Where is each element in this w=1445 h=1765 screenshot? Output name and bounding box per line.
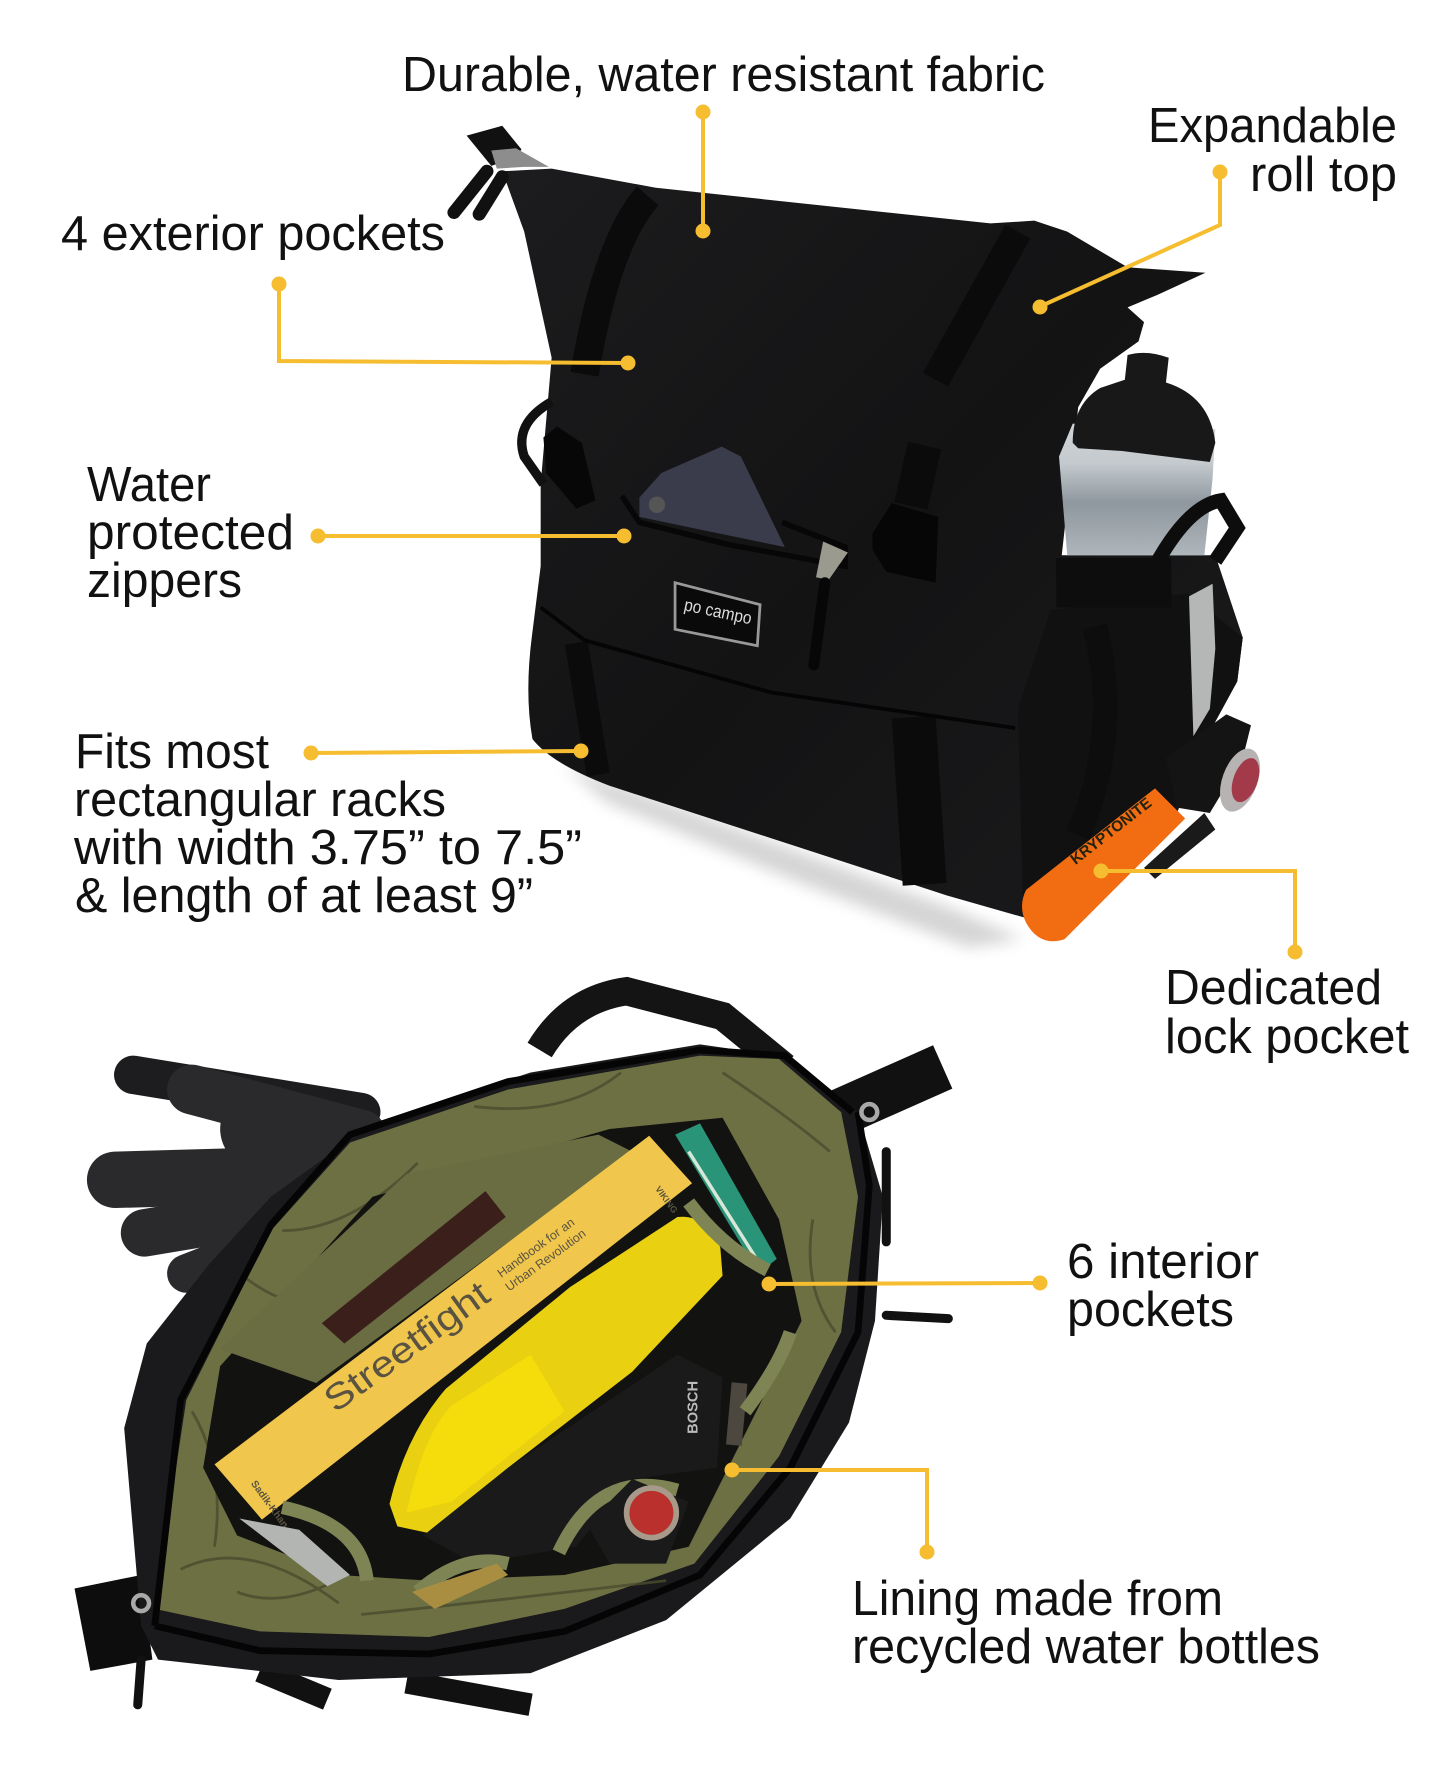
callout: zippers bbox=[87, 458, 632, 608]
left strap bbox=[75, 1575, 152, 1671]
orange lock bbox=[1022, 788, 1215, 941]
yellow lid bbox=[390, 1217, 723, 1533]
callout: interior pockets bbox=[762, 1235, 1259, 1337]
red light bbox=[587, 1479, 689, 1564]
callout: exterior pockets: 4 exterior pockets bbox=[61, 207, 445, 261]
callout: durable fabric bbox=[402, 48, 1045, 238]
callout: zippers: protected bbox=[87, 506, 294, 560]
callout: interior pockets: pockets bbox=[1067, 1283, 1234, 1337]
callout: lock pocket: lock pocket bbox=[1165, 1010, 1409, 1064]
phone camera bbox=[649, 497, 665, 513]
callout: lock pocket: Dedicated bbox=[1165, 961, 1382, 1015]
callout: lock pocket bbox=[1094, 864, 1409, 1064]
callout: exterior pockets bbox=[61, 207, 636, 370]
callout: zippers: zippers bbox=[87, 554, 242, 608]
book: Streetfight: Handbook for an bbox=[495, 1215, 577, 1280]
book: Streetfight: Streetfight bbox=[316, 1273, 497, 1420]
book: Streetfight: Urban Revolution bbox=[503, 1226, 589, 1294]
bike light bbox=[1166, 714, 1268, 817]
zip pocket olive bbox=[220, 1135, 632, 1383]
book: Streetfight: Sadik-Khan bbox=[248, 1479, 290, 1530]
callout: lining bbox=[724, 1462, 1320, 1674]
webbing straps bbox=[576, 196, 1018, 884]
brand patch: po campo bbox=[682, 594, 754, 628]
right buckle bbox=[873, 503, 938, 583]
callout: roll top: Expandable bbox=[1148, 99, 1397, 153]
tool in pouch bbox=[734, 1383, 739, 1445]
callout: racks: rectangular racks bbox=[74, 773, 446, 827]
left buckle bbox=[543, 426, 596, 509]
side gusset bbox=[1018, 594, 1243, 917]
green case bbox=[675, 1123, 777, 1274]
water bottle bbox=[1059, 353, 1215, 555]
callout: roll top: roll top bbox=[1250, 148, 1397, 202]
bag shell bbox=[124, 1044, 883, 1680]
zipper track bbox=[155, 1050, 869, 1654]
callout: zippers: Water bbox=[87, 458, 211, 512]
right strap bbox=[841, 1067, 943, 1112]
side zipper pulls bbox=[138, 1152, 948, 1705]
callout: racks: & length of at least 9” bbox=[75, 869, 533, 923]
gloves bbox=[115, 1075, 361, 1274]
drawstring pockets bbox=[282, 1202, 790, 1592]
orange lock: KRYPTONITE bbox=[1067, 795, 1155, 868]
left handle loop bbox=[522, 402, 552, 484]
callout: roll top bbox=[1032, 99, 1397, 314]
bag body bbox=[502, 169, 1243, 917]
callout: racks bbox=[73, 725, 589, 923]
photo: messenger bag exterior bbox=[454, 126, 1268, 947]
interior dark cavity bbox=[203, 1118, 802, 1581]
callout: lining: Lining made from bbox=[852, 1572, 1223, 1626]
sunglasses bbox=[412, 1564, 508, 1609]
phone in pocket bbox=[639, 447, 785, 547]
zipper pull bbox=[814, 542, 848, 665]
front pocket bbox=[622, 496, 845, 566]
reflective strip bbox=[1189, 584, 1215, 736]
callout: racks: with width 3.75” to 7.5” bbox=[73, 821, 582, 875]
callout: lining: recycled water bottles bbox=[852, 1620, 1320, 1674]
callout: interior pockets: 6 interior bbox=[1067, 1235, 1259, 1289]
lower pocket seam bbox=[541, 607, 1015, 728]
wallet bbox=[322, 1191, 506, 1344]
black pouch: Bosch bbox=[423, 1355, 723, 1564]
top-left zipper pulls bbox=[454, 126, 549, 214]
lining pattern bbox=[181, 1073, 835, 1614]
black pouch: Bosch: BOSCH bbox=[686, 1381, 702, 1434]
top carry handle bbox=[540, 991, 785, 1067]
bag shadow bbox=[563, 764, 1023, 947]
callout: racks: Fits most bbox=[75, 725, 269, 779]
callout: durable fabric: Durable, water resistant fabric bbox=[402, 48, 1045, 102]
tin in pocket bbox=[239, 1519, 350, 1586]
book: Streetfight bbox=[215, 1136, 692, 1530]
photo: open bag interior bbox=[75, 991, 948, 1705]
olive lining bbox=[155, 1056, 858, 1637]
bottom straps bbox=[260, 1671, 531, 1705]
brand patch bbox=[675, 583, 760, 646]
side pocket and strap bbox=[1056, 500, 1237, 835]
book: Streetfight: VIKING bbox=[653, 1184, 680, 1215]
metal rings bbox=[133, 1104, 877, 1611]
